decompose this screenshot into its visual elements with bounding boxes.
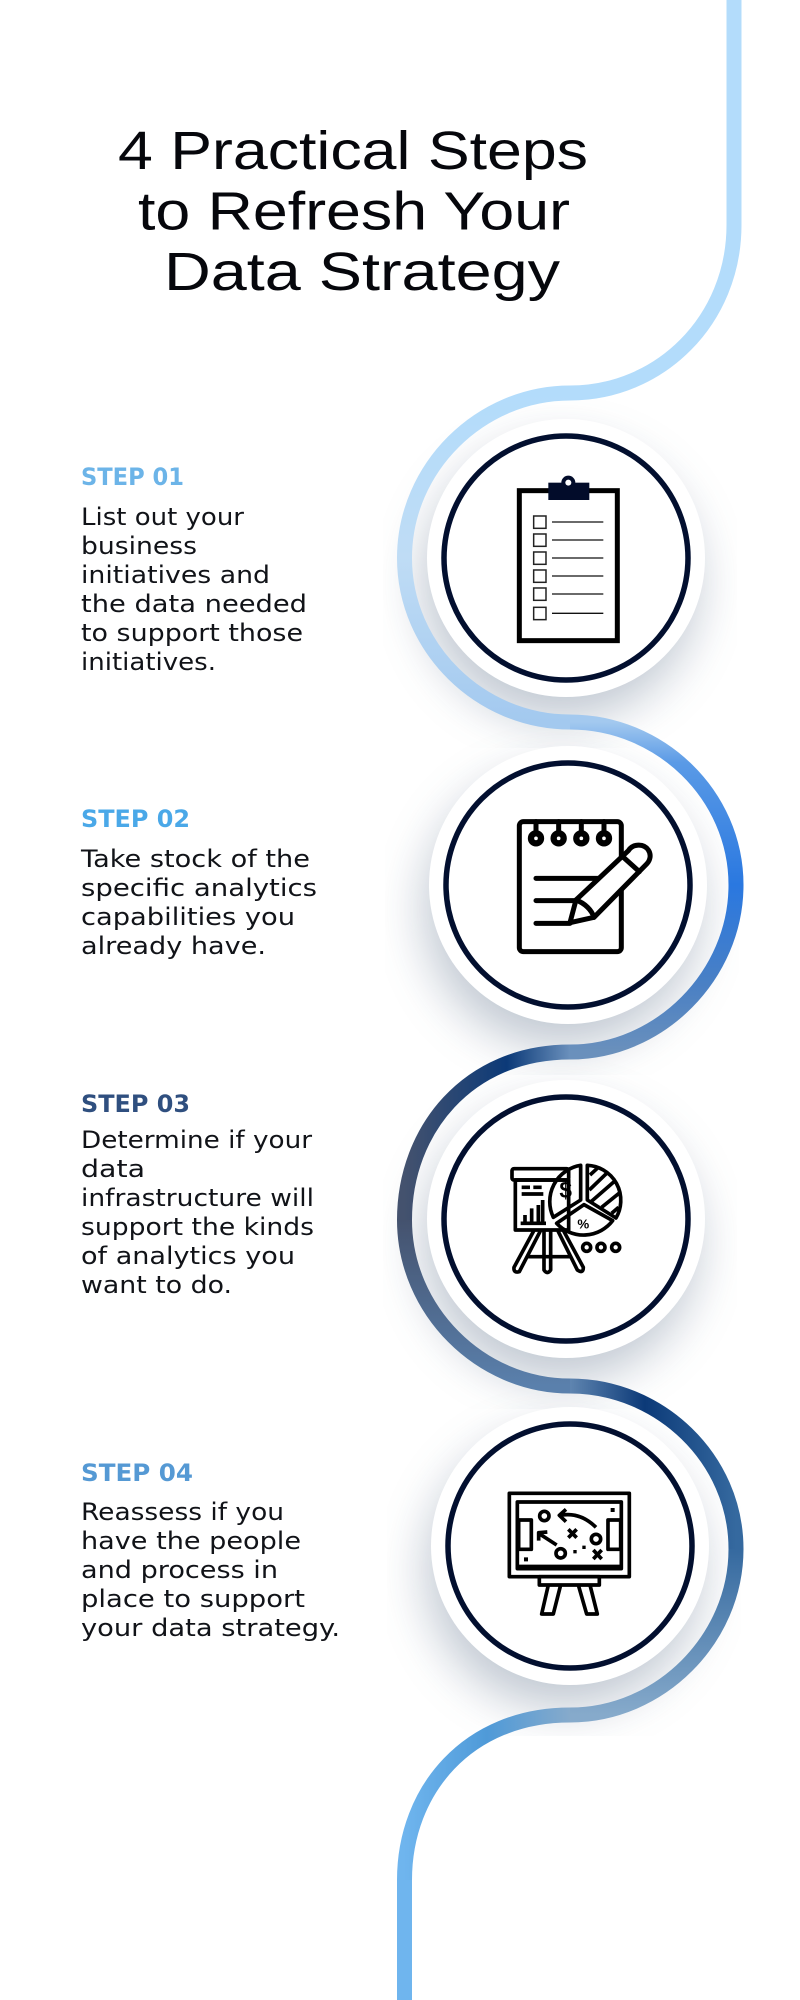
text block: step 02 description: capabilities you xyxy=(81,903,295,931)
text block: step 02 description: specific analytics xyxy=(81,874,317,902)
heading: step 03: STEP 03 xyxy=(81,1090,190,1118)
icon: presentation board with pie chart: % xyxy=(577,1217,589,1232)
text block: step 02 description: Take stock of the xyxy=(80,845,310,873)
badge: step 03 circle xyxy=(427,1080,705,1358)
icon: strategy board on easel xyxy=(509,1493,629,1614)
text block: step 04 description: have the people xyxy=(81,1527,301,1555)
title: 4 Practical Steps xyxy=(118,121,588,181)
text block: step 03 description: Determine if your xyxy=(81,1126,312,1154)
panel: step 04 text xyxy=(81,1459,340,1642)
heading: step 02: STEP 02 xyxy=(81,805,190,833)
panel: step 03 text xyxy=(81,1090,314,1299)
text block: step 04 description: place to support xyxy=(81,1585,305,1613)
icon: presentation board with pie chart xyxy=(512,1165,621,1272)
text block: step 02 description xyxy=(80,845,317,960)
icon: presentation board with pie chart: $ xyxy=(559,1177,572,1203)
text block: step 01 description: the data needed xyxy=(81,590,307,618)
text block: step 03 description: infrastructure will xyxy=(81,1184,314,1212)
badge: step 02 circle xyxy=(429,746,707,1024)
text block: step 02 description: already have. xyxy=(81,932,266,960)
text block: step 01 description: business xyxy=(81,532,197,560)
panel: step 02 text xyxy=(80,805,317,960)
text block: step 01 description xyxy=(81,503,307,676)
winding gradient line xyxy=(404,0,736,2000)
text block: step 03 description: data xyxy=(81,1155,145,1183)
text block: step 01 description: to support those xyxy=(81,619,303,647)
text block: step 01 description: initiatives and xyxy=(81,561,270,589)
panel: step 01 text xyxy=(81,463,307,676)
heading: step 04: STEP 04 xyxy=(81,1459,193,1487)
text block: step 01 description: List out your xyxy=(81,503,244,531)
text block: step 04 description: and process in xyxy=(81,1556,278,1584)
text block: step 03 description: want to do. xyxy=(81,1271,232,1299)
text block: step 04 description: Reassess if you xyxy=(81,1498,284,1526)
icon: notepad and pencil xyxy=(519,822,650,952)
text block: step 03 description xyxy=(81,1126,314,1299)
title: to Refresh Your xyxy=(138,182,570,242)
text block: step 03 description: support the kinds xyxy=(81,1213,314,1241)
badge: step 04 circle xyxy=(431,1407,709,1685)
text block: step 04 description xyxy=(81,1498,340,1642)
icon: clipboard checklist xyxy=(519,476,617,641)
heading: step 01: STEP 01 xyxy=(81,463,184,491)
text block: step 03 description: of analytics you xyxy=(81,1242,295,1270)
soft shadows behind the badges xyxy=(422,444,698,720)
text block: step 04 description: your data strategy. xyxy=(81,1614,340,1642)
badge: step 01 circle xyxy=(427,419,705,697)
text block: step 01 description: initiatives. xyxy=(81,648,216,676)
title: Data Strategy xyxy=(164,242,560,302)
title xyxy=(118,121,588,302)
